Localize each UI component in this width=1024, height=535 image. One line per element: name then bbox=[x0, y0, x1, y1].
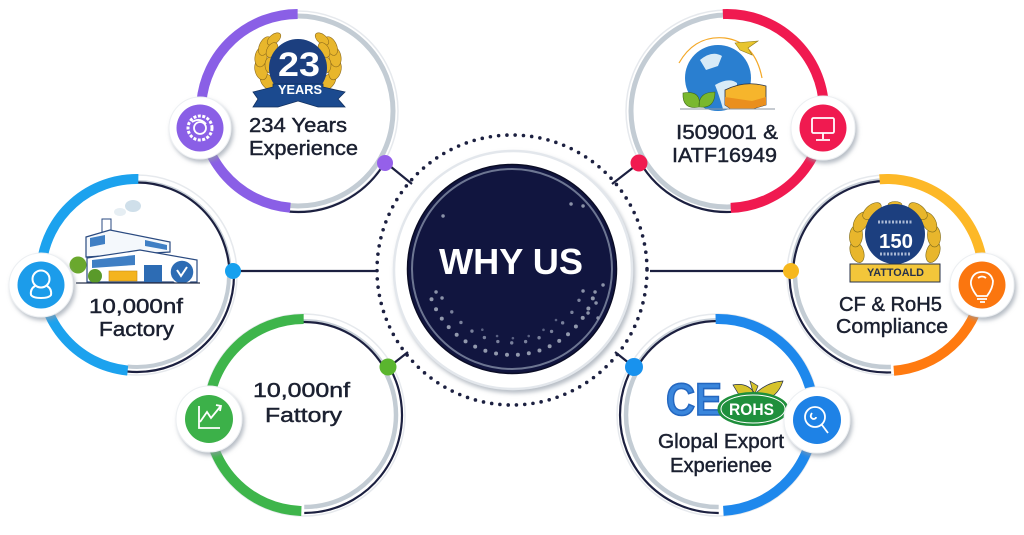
label: 234 Years bbox=[249, 115, 347, 137]
panel: iso certification bbox=[623, 7, 855, 215]
label: Compliance bbox=[836, 316, 948, 338]
icon: seal badge: YATTOALD bbox=[867, 267, 924, 279]
connector lines bbox=[233, 162, 791, 367]
center: why us bbox=[377, 135, 647, 405]
label: Factory bbox=[99, 319, 174, 341]
label: I509001 & bbox=[676, 122, 779, 144]
icon: chart badge bbox=[176, 386, 242, 452]
label: IATF16949 bbox=[672, 145, 777, 167]
icon: laurel badge 23 bbox=[253, 30, 345, 107]
icon: laurel badge 23: YEARS bbox=[278, 82, 322, 97]
white ring bbox=[394, 151, 632, 389]
icon: monitor badge bbox=[791, 96, 855, 160]
dot pattern bbox=[431, 204, 603, 355]
connector dot bbox=[377, 155, 393, 171]
connector dot bbox=[783, 263, 799, 279]
icon: bulb badge bbox=[950, 253, 1014, 317]
label: 10,000nf bbox=[89, 296, 184, 318]
icon: seal badge bbox=[847, 199, 943, 282]
label: 10,000nf bbox=[253, 380, 351, 402]
icon: laurel badge 23: 23 bbox=[278, 46, 320, 84]
label: Fattory bbox=[265, 405, 342, 427]
dotted ring bbox=[377, 135, 647, 405]
title: WHY US bbox=[439, 241, 583, 282]
icon: factory bbox=[70, 200, 200, 284]
icon: ce rohs marks: ROHS bbox=[729, 400, 774, 419]
icon: person badge bbox=[9, 253, 73, 317]
label: Glopal Export bbox=[658, 431, 784, 453]
icon: ce rohs marks bbox=[666, 374, 788, 426]
icon: globe and parcel bbox=[679, 38, 775, 111]
connector dot bbox=[625, 358, 643, 376]
panel: years experience bbox=[159, 0, 437, 250]
panel: factory bbox=[9, 169, 243, 381]
panel: compliance bbox=[776, 164, 1014, 386]
icon: seal badge: 150 bbox=[879, 231, 913, 253]
icon: ce rohs marks: CE bbox=[666, 374, 722, 425]
dark disc bbox=[408, 164, 616, 374]
connector dot bbox=[225, 263, 241, 279]
icon: magnifier badge bbox=[784, 387, 850, 453]
icon: gear badge bbox=[169, 97, 231, 159]
connector dot bbox=[380, 358, 396, 376]
label: Experienee bbox=[670, 455, 772, 477]
panel: fattory bbox=[170, 281, 438, 535]
label: CF & RoH5 bbox=[839, 294, 942, 316]
connector dot bbox=[630, 154, 648, 172]
panel: global export bbox=[587, 284, 850, 535]
label: Experience bbox=[249, 138, 358, 160]
